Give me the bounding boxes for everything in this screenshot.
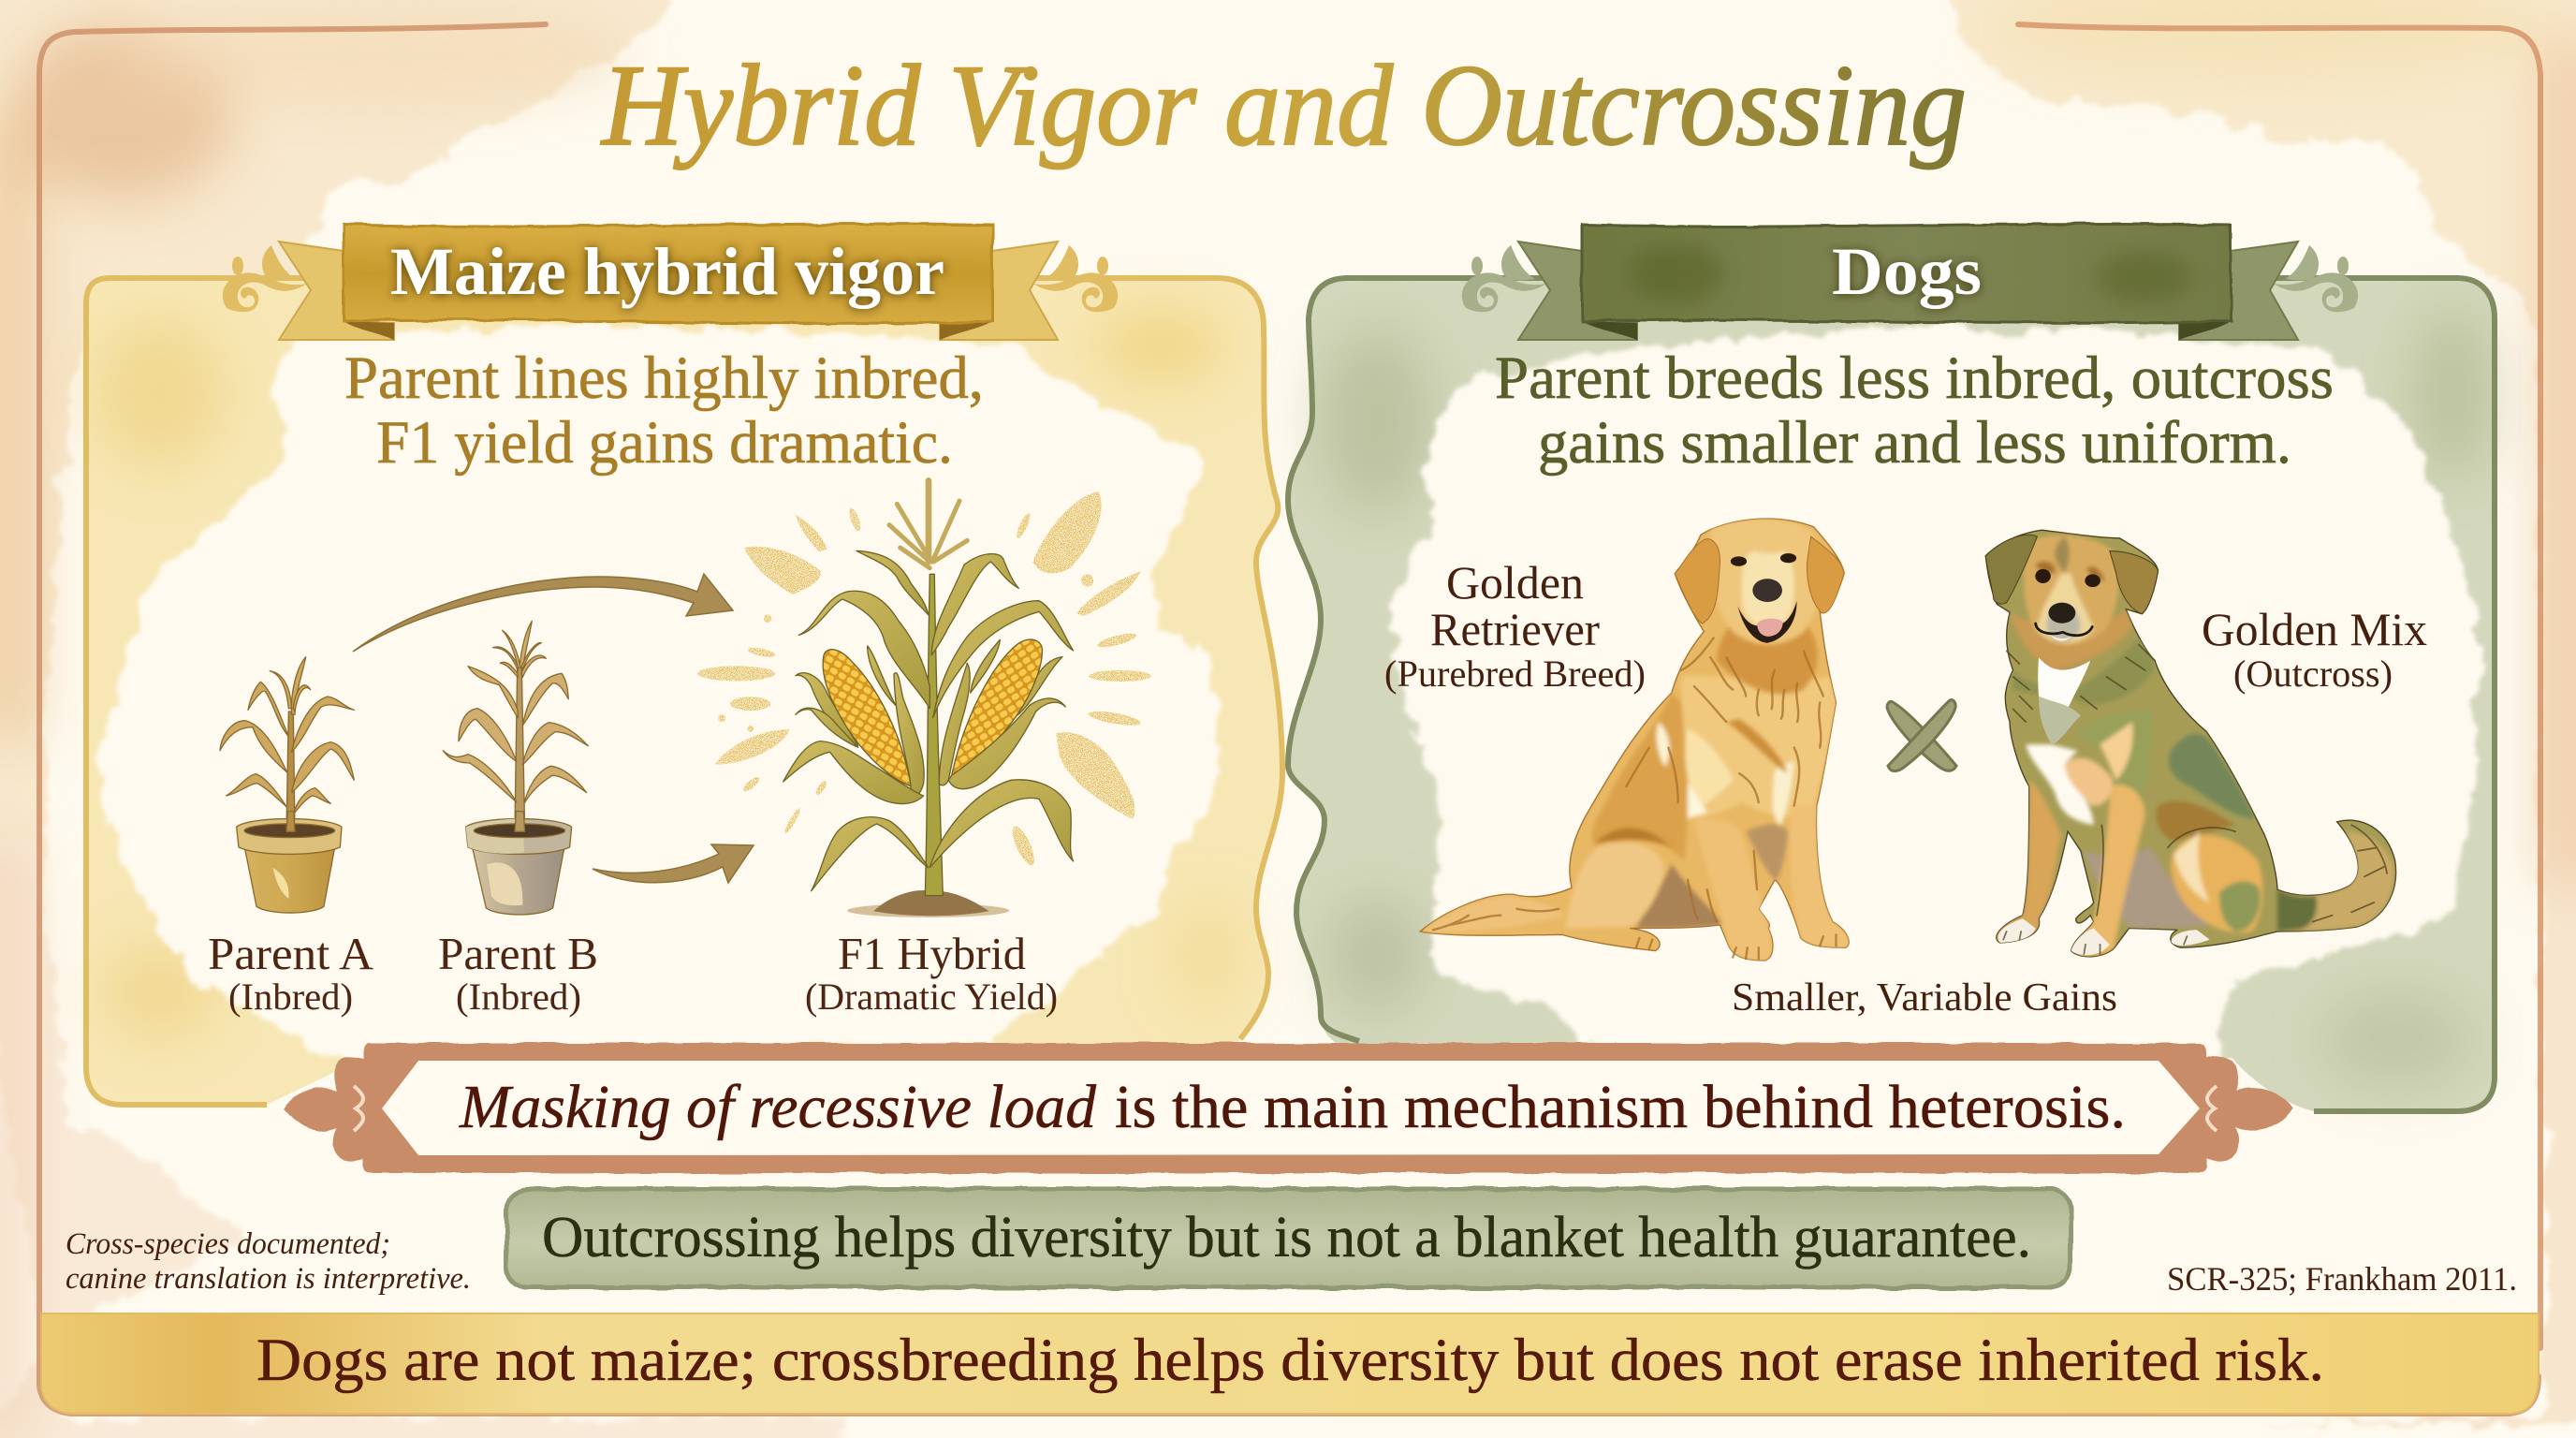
icon: cross symbol — [1887, 699, 1956, 771]
coat patches — [1997, 536, 2393, 957]
footnote: evidence note: canine translation is interpretive. — [66, 1262, 471, 1296]
banner text: Masking of recessive load — [459, 1073, 1097, 1141]
labels: golden mix: (Outcross) — [2233, 653, 2393, 695]
corn ear: right — [952, 639, 1042, 775]
soil — [847, 890, 1009, 917]
labels: parent B: Parent B — [438, 928, 598, 979]
ribbon: dogs heading — [1462, 224, 2358, 340]
arrow: parent B to F1 hybrid — [593, 844, 754, 883]
icon: golden retriever — [1420, 519, 1849, 961]
ribbon text: Dogs — [1832, 234, 1982, 309]
ears — [1985, 535, 2037, 604]
text: dogs summary: Parent breeds less inbred, outcross — [1495, 345, 2334, 412]
labels: golden retriever: Golden — [1446, 556, 1584, 609]
icon: yield burst — [697, 492, 1151, 868]
footnote: evidence note — [66, 1227, 471, 1296]
text: maize summary — [344, 345, 984, 477]
corn ear: left — [823, 650, 911, 786]
labels: golden mix: Golden Mix — [2202, 603, 2427, 655]
banner text — [459, 1073, 2126, 1141]
panel: dogs — [1288, 278, 2495, 1111]
labels: parent A — [208, 928, 374, 1018]
labels: golden retriever: Retriever — [1430, 603, 1600, 655]
footnote: source: SCR-325; Frankham 2011. — [2167, 1260, 2517, 1298]
ornaments: gold scrolls — [223, 245, 1118, 312]
footnote: evidence note: Cross-species documented; — [66, 1227, 390, 1261]
text: dogs summary: gains smaller and less uniform. — [1538, 409, 2291, 477]
title: Hybrid Vigor and Outcrossing — [600, 41, 1967, 169]
icon: golden mix dog — [1985, 530, 2396, 957]
ears — [1675, 539, 1720, 624]
arrow: parent A to F1 hybrid — [353, 574, 733, 652]
labels: F1 hybrid: (Dramatic Yield) — [805, 976, 1058, 1018]
label: smaller variable gains: Smaller, Variable Gains — [1732, 976, 2117, 1020]
labels: parent B: (Inbred) — [456, 976, 581, 1018]
banner text: is the main mechanism behind heterosis. — [1115, 1073, 2126, 1141]
labels: golden mix — [2202, 603, 2427, 695]
icon: parent A plant in pot — [220, 657, 354, 913]
bottom takeaway band: Dogs are not maize; crossbreeding helps diversity but does not erase inherited risk. — [256, 1327, 2324, 1394]
ornaments: olive scrolls — [1462, 245, 2358, 312]
labels: golden retriever: (Purebred Breed) — [1384, 653, 1646, 695]
banner: masking of recessive load — [284, 1043, 2293, 1173]
ribbon text: Maize hybrid vigor — [390, 234, 944, 309]
labels: parent B — [438, 928, 598, 1018]
labels: parent A: Parent A — [208, 928, 374, 979]
bottom takeaway band — [41, 1313, 2539, 1414]
fur shading — [1424, 520, 1849, 961]
text: maize summary: Parent lines highly inbred, — [344, 345, 984, 412]
labels: golden retriever — [1384, 556, 1646, 695]
text: dogs summary — [1495, 345, 2334, 477]
panel: maize — [86, 278, 1282, 1105]
callout: outcrossing: Outcrossing helps diversity but is not a blanket health guarantee. — [542, 1206, 2031, 1269]
labels: parent A: (Inbred) — [228, 976, 353, 1018]
labels: F1 hybrid — [805, 928, 1058, 1018]
icon: parent B plant in pot — [443, 621, 588, 915]
chest bib and paws — [2038, 657, 2091, 707]
ribbon: maize heading — [223, 224, 1118, 340]
fur strokes — [1433, 638, 1836, 959]
callout: outcrossing — [506, 1189, 2071, 1287]
icon: F1 hybrid corn plant — [783, 480, 1074, 917]
outline strokes — [2003, 644, 2387, 954]
tassel — [889, 480, 967, 568]
face — [2035, 569, 2051, 583]
text: maize summary: F1 yield gains dramatic. — [376, 409, 953, 477]
face — [1731, 556, 1747, 566]
labels: F1 hybrid: F1 Hybrid — [838, 928, 1026, 979]
